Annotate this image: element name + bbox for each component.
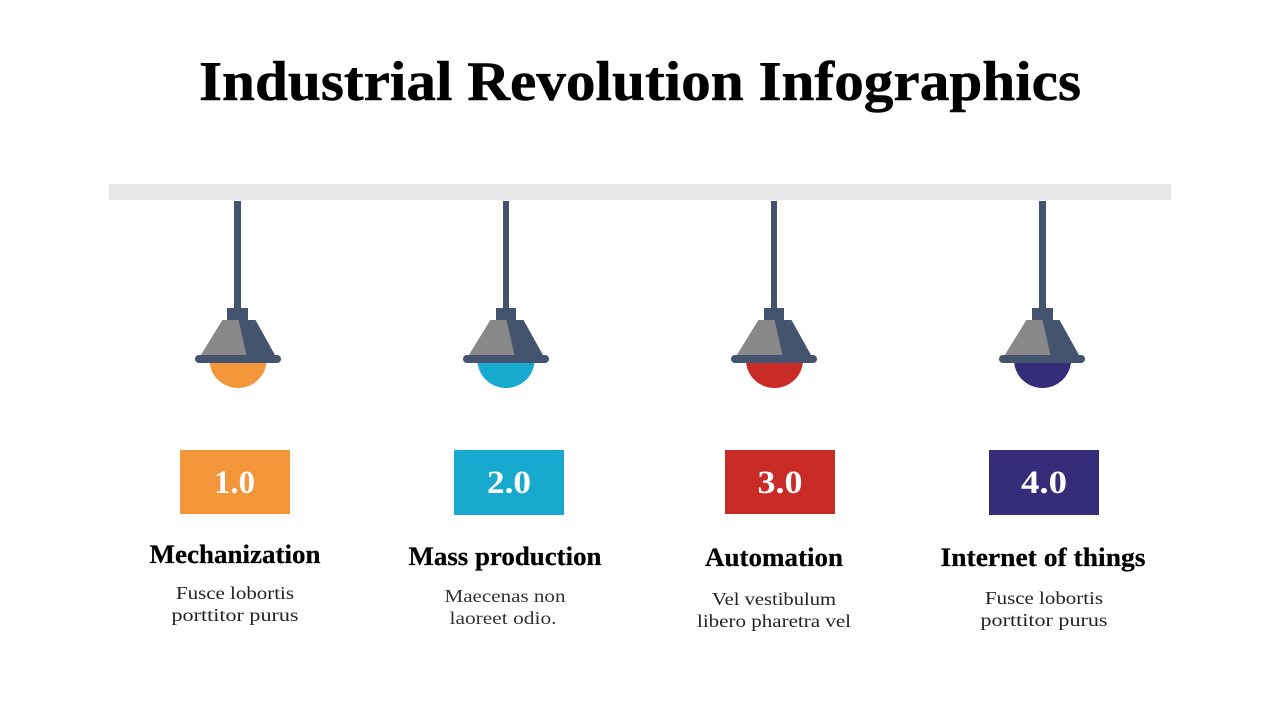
description: laoreet odio. <box>450 608 556 628</box>
ceiling bar <box>109 184 1171 200</box>
number badge 1.0: 1.0 <box>214 465 255 501</box>
description: libero pharetra vel <box>697 611 851 631</box>
heading: Mass production: Mass production <box>408 542 602 571</box>
description: Vel vestibulum <box>712 589 836 609</box>
number badge 2.0 <box>454 450 564 515</box>
column: Mechanization <box>150 201 321 625</box>
number badge 4.0 <box>989 450 1099 515</box>
number badge 2.0: 2.0 <box>487 465 531 501</box>
number badge 3.0: 3.0 <box>758 465 802 501</box>
icon: orange hanging lamp <box>195 201 281 388</box>
number badge 3.0 <box>725 450 835 514</box>
number badge 4.0: 4.0 <box>1021 465 1067 501</box>
description: Fusce lobortis <box>176 583 294 603</box>
description: porttitor purus <box>980 610 1108 630</box>
icon: red hanging lamp <box>731 201 817 388</box>
column: Mass production <box>408 201 602 628</box>
description: Fusce lobortis <box>985 588 1103 608</box>
column: Internet of things <box>940 201 1146 630</box>
column: Automation <box>697 201 851 631</box>
number badge 1.0 <box>180 450 290 514</box>
title: Industrial Revolution Infographics <box>199 51 1081 113</box>
icon: indigo hanging lamp <box>999 201 1085 388</box>
heading: Automation: Automation <box>705 543 844 572</box>
heading: Internet of things: Internet of things <box>940 543 1146 572</box>
icon: blue hanging lamp <box>463 201 549 388</box>
description: Maecenas non <box>444 586 566 606</box>
heading: Mechanization: Mechanization <box>150 540 321 569</box>
description: porttitor purus <box>172 605 298 625</box>
